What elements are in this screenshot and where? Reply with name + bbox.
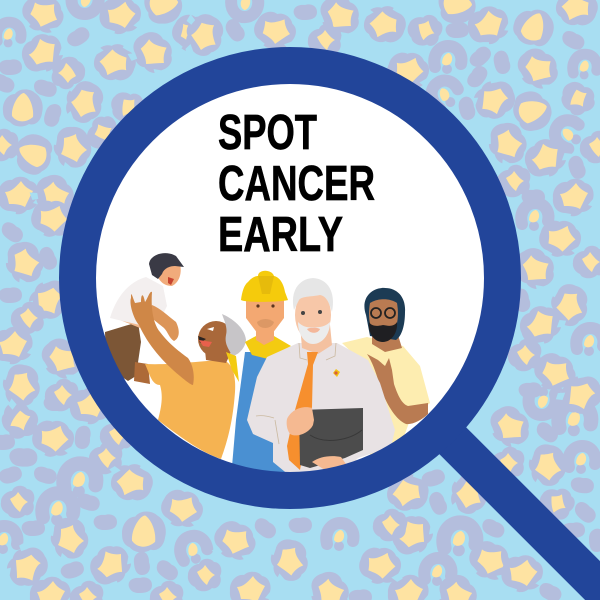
person: child being lifted bbox=[105, 253, 184, 381]
group of people bbox=[105, 253, 430, 480]
title: Spot Cancer Early: SPOT bbox=[218, 106, 317, 160]
title: Spot Cancer Early: EARLY bbox=[218, 208, 343, 262]
title: Spot Cancer Early: CANCER bbox=[218, 157, 375, 211]
title: Spot Cancer Early bbox=[218, 106, 375, 262]
person: grandfather bbox=[130, 292, 246, 459]
person: construction worker bbox=[226, 270, 291, 472]
person: man with glasses and beard bbox=[342, 288, 430, 470]
magnifying glass handle bbox=[440, 428, 600, 600]
person: doctor with briefcase bbox=[247, 278, 395, 478]
magnifying glass lens interior bbox=[90, 78, 490, 478]
magnifying glass ring bbox=[78, 66, 502, 490]
